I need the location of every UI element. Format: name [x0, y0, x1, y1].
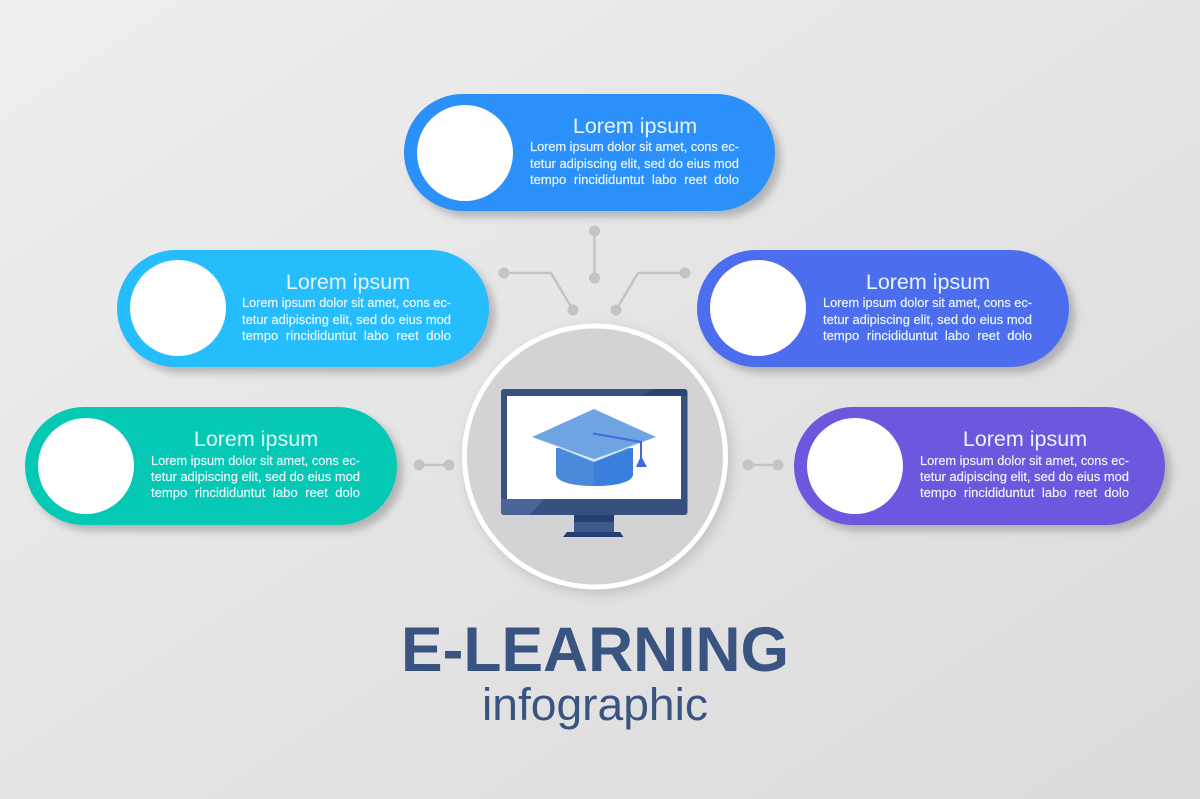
panel: lower right purple pill: Lorem ipsum dolor sit amet, cons ec- — [920, 453, 1129, 468]
panel: upper left cyan pill: tempo rincididuntut labo reet dolo — [242, 328, 451, 343]
panel: upper right indigo pill: tempo rincididuntut labo reet dolo — [823, 328, 1032, 343]
panel: upper left cyan pill: Lorem ipsum dolor sit amet, cons ec- — [242, 295, 451, 310]
panel: top blue pill — [404, 94, 781, 217]
panel: upper right indigo pill: Lorem ipsum — [866, 270, 990, 294]
panel: top blue pill: tetur adipiscing elit, sed do eius mod — [530, 156, 739, 171]
panel: top blue pill: tempo rincididuntut labo reet dolo — [530, 172, 739, 187]
panel: upper left cyan pill — [117, 250, 495, 373]
panel: lower right purple pill — [794, 407, 1171, 531]
connector: upper right — [610, 268, 690, 316]
icon: monitor — [501, 389, 688, 537]
connector: lower right — [742, 460, 784, 470]
title: E-LEARNING — [401, 615, 789, 685]
panel: upper right indigo pill: Lorem ipsum dolor sit amet, cons ec- — [823, 295, 1032, 310]
panel: top blue pill: Lorem ipsum — [573, 114, 697, 138]
panel: upper right indigo pill: tetur adipiscing elit, sed do eius mod — [823, 312, 1032, 327]
connector: lower left — [414, 460, 454, 470]
panel: lower right purple pill: Lorem ipsum — [963, 427, 1087, 451]
icon: graduation cap — [532, 409, 656, 486]
panel: upper left cyan pill: Lorem ipsum — [286, 270, 410, 294]
connector: top vertical — [589, 226, 600, 284]
panel: lower right purple pill: tempo rincididuntut labo reet dolo — [920, 485, 1129, 500]
panel: top blue pill: Lorem ipsum dolor sit amet, cons ec- — [530, 139, 739, 154]
connector: upper left — [498, 268, 578, 316]
panel: upper right indigo pill — [697, 250, 1075, 373]
panel: upper left cyan pill: tetur adipiscing elit, sed do eius mod — [242, 312, 451, 327]
panel: lower right purple pill: tetur adipiscing elit, sed do eius mod — [920, 469, 1129, 484]
center circle with monitor — [464, 326, 732, 594]
subtitle: infographic — [482, 679, 708, 730]
panel: lower left teal pill — [25, 407, 403, 531]
panel: lower left teal pill: tempo rincididuntut labo reet dolo — [151, 485, 360, 500]
panel: lower left teal pill: tetur adipiscing elit, sed do eius mod — [151, 469, 360, 484]
panel: lower left teal pill: Lorem ipsum — [194, 427, 318, 451]
panel: lower left teal pill: Lorem ipsum dolor sit amet, cons ec- — [151, 453, 360, 468]
